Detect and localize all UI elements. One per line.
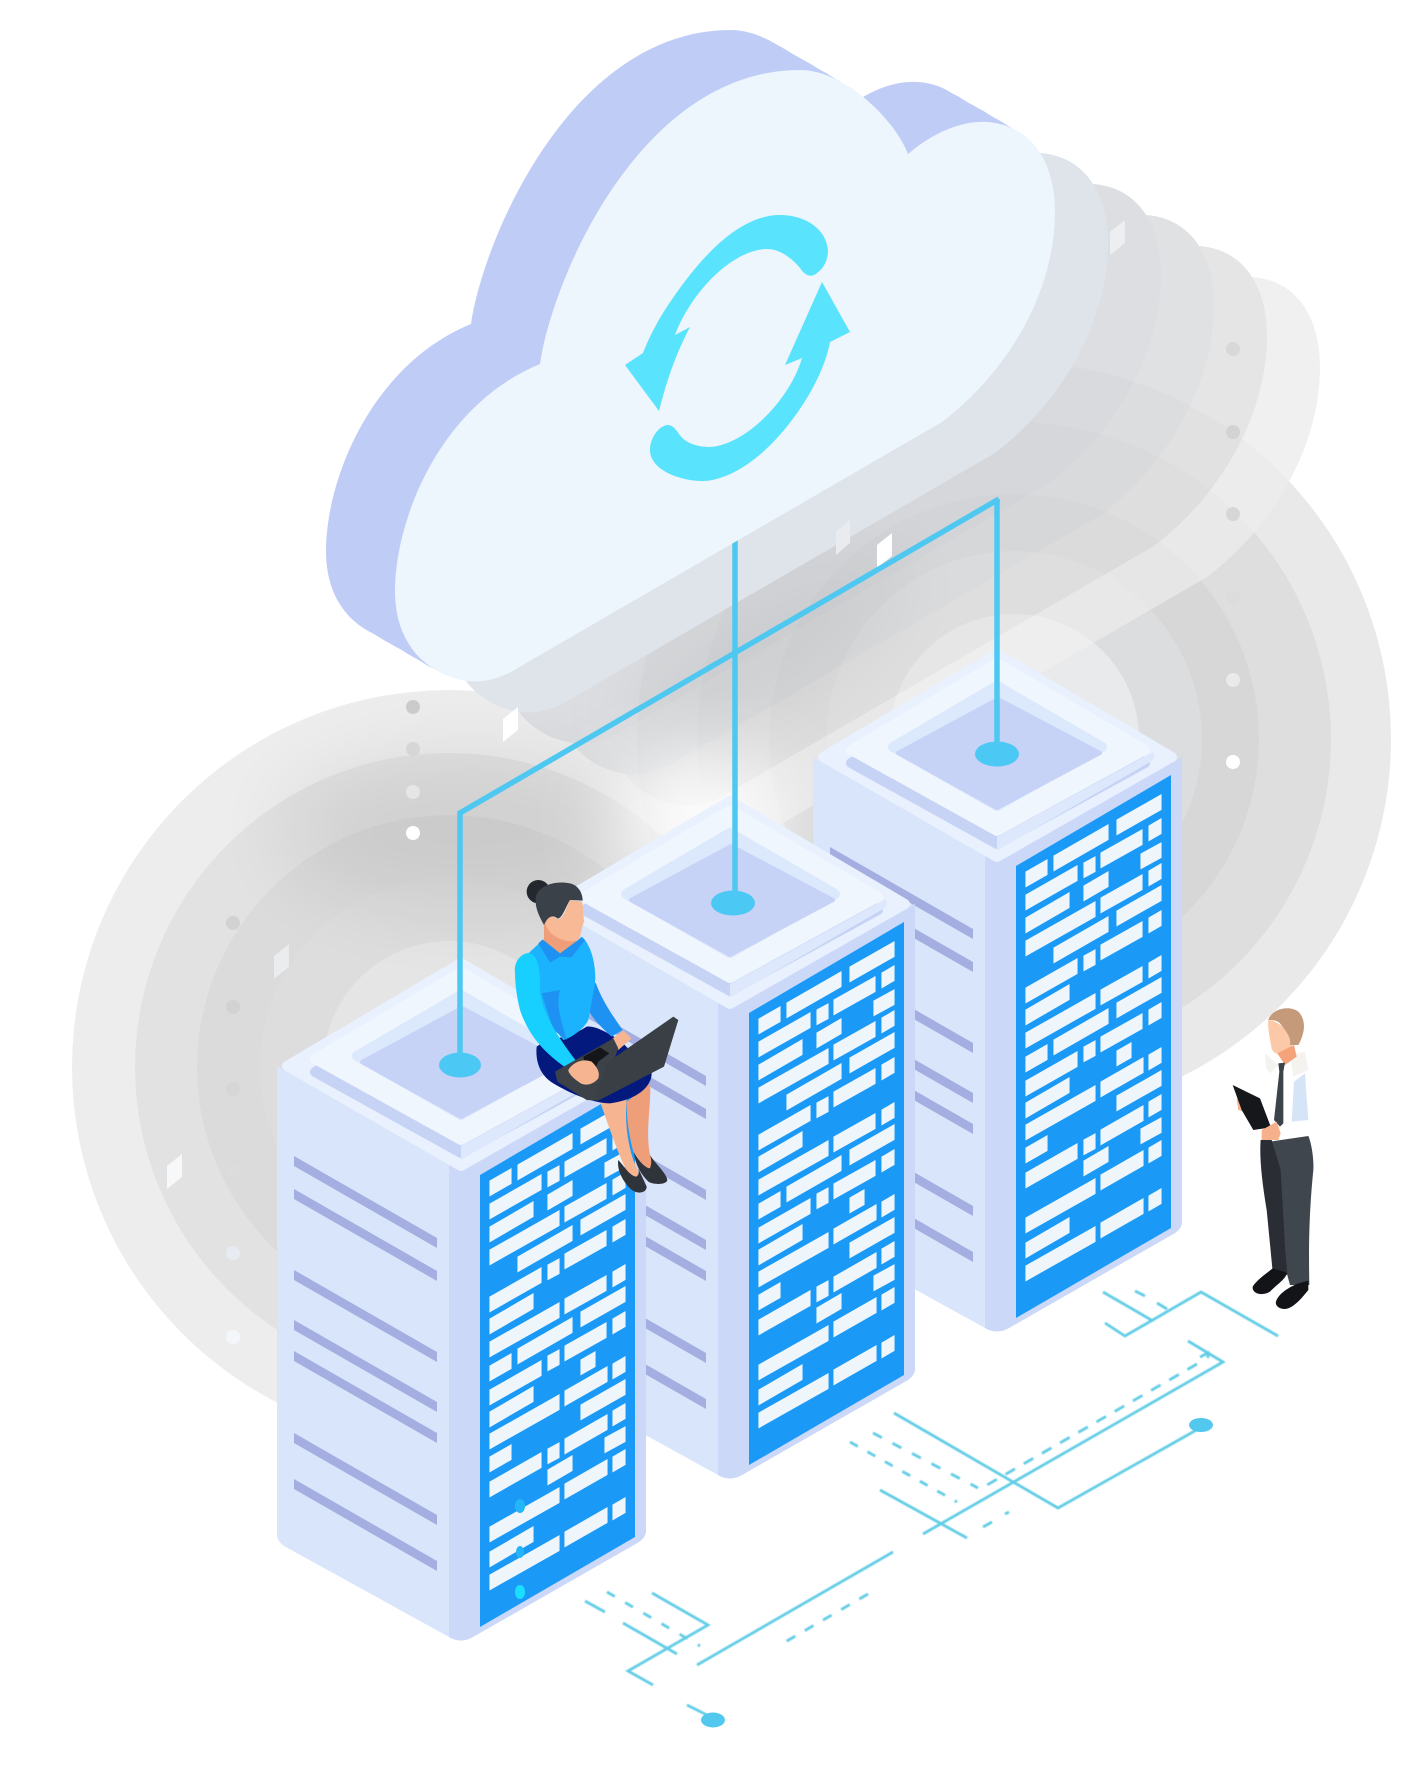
skirt <box>536 1027 652 1103</box>
woman with laptop <box>515 880 678 1193</box>
server left <box>277 963 646 1640</box>
laptop screen <box>595 1017 678 1101</box>
far leg <box>627 1083 657 1170</box>
server blue panel <box>1016 775 1171 1318</box>
far arm <box>587 980 623 1037</box>
server vent stripes <box>830 847 973 1262</box>
far shoe <box>634 1153 667 1184</box>
soft shading behind servers <box>280 522 932 910</box>
server cap <box>823 654 1172 857</box>
cloud shadow stack <box>501 132 1320 836</box>
nearest cloud shadow <box>448 101 1108 712</box>
trousers light leg <box>1270 1136 1313 1285</box>
faint ring arcs over shadow <box>637 362 1391 1116</box>
server middle <box>546 801 915 1478</box>
hair <box>536 882 583 925</box>
circuit end dots <box>701 1418 1213 1728</box>
face <box>1268 1020 1292 1054</box>
sync arrows <box>625 215 850 481</box>
server side strips <box>985 757 1182 1332</box>
near arm <box>515 953 577 1068</box>
cloud <box>326 30 1055 682</box>
collar <box>538 937 585 963</box>
far hand <box>613 1031 632 1050</box>
tablet <box>1233 1085 1271 1130</box>
torso <box>528 937 595 1040</box>
laptop base <box>555 1038 618 1101</box>
shoes <box>1253 1268 1308 1309</box>
right concentric circles <box>637 362 1391 1116</box>
left concentric circles <box>72 690 826 1444</box>
torso shading <box>542 990 567 1040</box>
shirt shading <box>1265 1052 1308 1077</box>
near leg <box>600 1098 639 1178</box>
status LEDs on left server <box>515 1499 525 1599</box>
floating dots <box>226 342 1240 1344</box>
cloud front face <box>395 70 1055 682</box>
near shoe <box>618 1160 647 1193</box>
connection end dots <box>439 742 1019 1078</box>
hair bun <box>527 880 550 903</box>
server panel bricks <box>1026 795 1161 1280</box>
laptop keyboard <box>583 1047 609 1083</box>
neck <box>544 922 578 957</box>
face <box>544 900 584 941</box>
server right <box>813 654 1182 1332</box>
trousers dark leg <box>1260 1140 1287 1275</box>
connection lines from cloud to servers <box>460 480 999 1064</box>
circuit traces <box>585 1291 1278 1715</box>
server body <box>813 757 1182 1332</box>
near hand <box>568 1060 599 1085</box>
belt hand <box>1262 1122 1281 1140</box>
shirt sleeve shading <box>1292 1073 1308 1122</box>
hair <box>1268 1008 1304 1045</box>
tie <box>1274 1063 1285 1127</box>
man with tablet <box>1233 1008 1313 1309</box>
neck <box>1277 1045 1297 1065</box>
floating small diamonds <box>167 220 1125 1189</box>
tablet hand <box>1237 1098 1244 1112</box>
cloud extrusion side <box>326 30 1046 676</box>
